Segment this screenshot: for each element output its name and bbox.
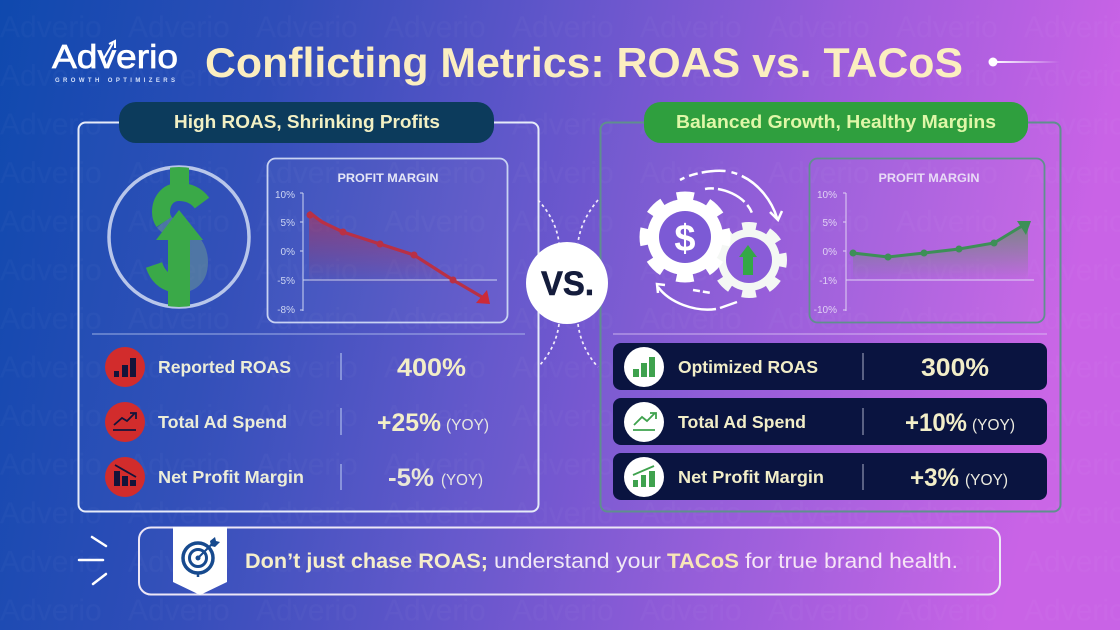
chart: profit margin rising: -10% — [814, 305, 837, 316]
metric row: Net Profit Margin: Net Profit Margin — [678, 467, 824, 487]
title: Conflicting Metrics: ROAS vs. TACoS — [205, 39, 963, 86]
metric row: Optimized ROAS: Optimized ROAS — [678, 357, 818, 377]
metric row: Total Ad Spend — [613, 398, 1047, 445]
metric row: Total Ad Spend — [105, 402, 489, 442]
pill heading: High ROAS, Shrinking Profits: High ROAS, Shrinking Profits — [174, 111, 440, 132]
icon: burst lines — [79, 537, 106, 584]
takeaway text: Don’t just chase ROAS; — [245, 549, 488, 573]
chart: profit margin rising: 10% — [817, 190, 837, 201]
metric row: Total Ad Spend: Total Ad Spend — [678, 412, 806, 432]
metric row: Total Ad Spend: +10% — [905, 409, 967, 437]
metric row: Net Profit Margin: Net Profit Margin — [158, 467, 304, 487]
chart: profit margin falling — [268, 158, 508, 322]
icon: dollar with up arrow — [109, 166, 249, 308]
chart: profit margin rising: 5% — [823, 218, 837, 229]
title decoration: dot and line — [988, 58, 1060, 66]
chart: profit margin falling: -5% — [277, 276, 295, 287]
metric row: Reported ROAS: 400% — [397, 354, 466, 382]
chart: profit margin falling: 0% — [281, 247, 295, 258]
takeaway text: understand your — [494, 549, 661, 573]
metric row: Net Profit Margin — [613, 453, 1047, 500]
pill heading: High ROAS, Shrinking Profits — [119, 102, 494, 143]
chart: profit margin rising: PROFIT MARGIN — [878, 171, 980, 185]
metric row: Total Ad Spend: Total Ad Spend — [158, 412, 287, 432]
metric row: Net Profit Margin: +3% — [910, 464, 959, 492]
metric row: Total Ad Spend: (YOY) — [446, 417, 489, 434]
takeaway text: TACoS — [667, 549, 739, 573]
icon: target badge — [173, 527, 227, 595]
metric row: Net Profit Margin: (YOY) — [441, 472, 483, 489]
metric row: Net Profit Margin — [105, 457, 483, 497]
logo: Adverio: GROWTH OPTIMIZERS — [55, 78, 175, 84]
chart: profit margin rising: 0% — [823, 247, 837, 258]
pill heading: Balanced Growth, Healthy Margins: Balanced Growth, Healthy Margins — [676, 111, 996, 132]
chart: profit margin falling: PROFIT MARGIN — [338, 171, 438, 185]
chart: profit margin falling: -8% — [277, 305, 295, 316]
metric row: Optimized ROAS — [613, 343, 1047, 390]
metric row: Optimized ROAS: 300% — [921, 354, 989, 382]
small gear — [715, 226, 783, 294]
callout: takeaway — [139, 527, 1000, 595]
chart: profit margin falling: 10% — [275, 190, 295, 201]
chart: profit margin rising: -1% — [819, 276, 837, 287]
takeaway text — [245, 549, 958, 573]
panel border — [600, 122, 1060, 512]
chart: profit margin rising — [810, 158, 1044, 322]
panel border — [78, 122, 538, 512]
logo: Adverio: Adverio — [52, 38, 178, 75]
metric row: Total Ad Spend: +25% — [377, 409, 441, 437]
takeaway text: for true brand health. — [745, 549, 958, 573]
metric row: Net Profit Margin: (YOY) — [965, 472, 1008, 489]
metric row: Total Ad Spend: (YOY) — [972, 417, 1015, 434]
chart: profit margin falling: 5% — [281, 218, 295, 229]
metric row: Net Profit Margin: -5% — [388, 464, 434, 492]
VS badge with dashed connectors: VS. — [541, 265, 594, 303]
metric row: Reported ROAS: Reported ROAS — [158, 357, 291, 377]
icon: gears with circular arrows — [644, 171, 783, 310]
panel: balanced growth — [600, 102, 1060, 512]
large gear: $ — [674, 218, 696, 260]
pill heading: Balanced Growth, Healthy Margins — [644, 102, 1028, 143]
divider — [92, 333, 525, 335]
VS badge with dashed connectors — [526, 200, 608, 367]
panel: high ROAS — [78, 102, 538, 512]
metric row: Reported ROAS — [105, 347, 466, 387]
divider — [613, 333, 1047, 335]
